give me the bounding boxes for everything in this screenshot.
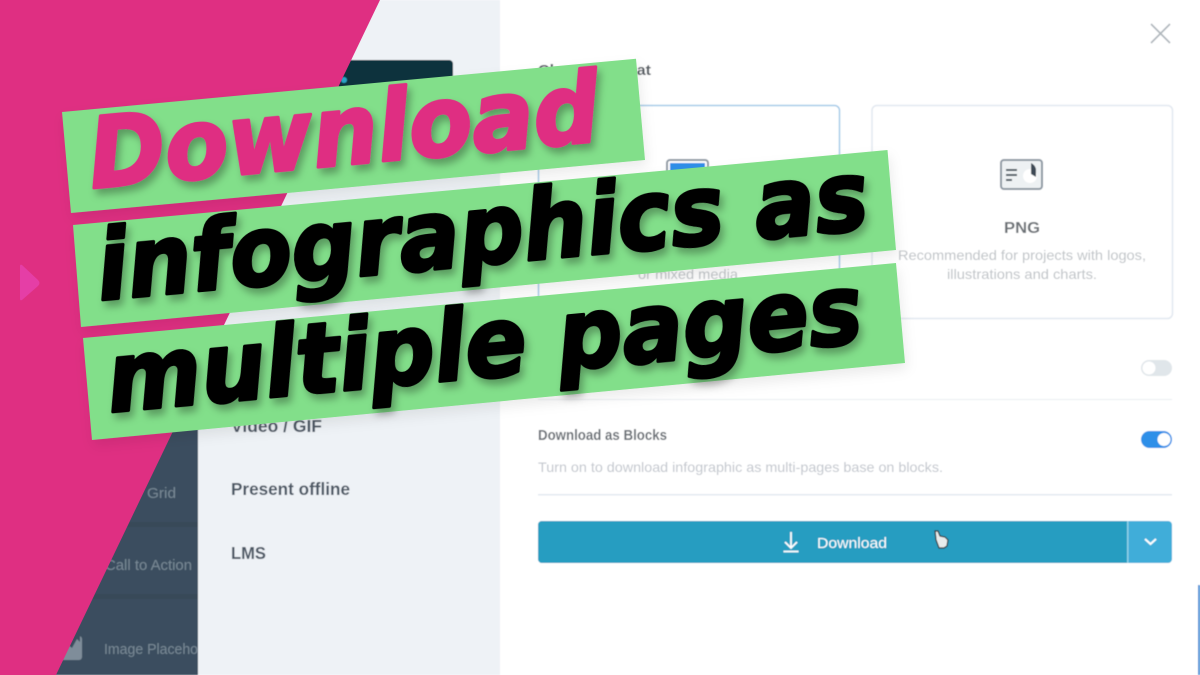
panel: dark editor sidebar <box>0 360 198 675</box>
headline words: multiple pages: multiple pages <box>102 252 867 435</box>
option: Video / GIF: Video / GIF <box>231 416 322 436</box>
description: PNG second line: illustrations and charts. <box>947 266 1097 282</box>
scrollbar sliver at right edge <box>1198 585 1200 675</box>
panel: export options column <box>198 0 500 675</box>
button: Download <box>538 521 1172 563</box>
label: PNG: PNG <box>1004 220 1040 237</box>
icon: download arrow <box>784 532 798 552</box>
headline word: Download: Download <box>84 51 605 211</box>
card: first format option <box>538 106 840 318</box>
panel: dialog white area <box>500 0 1200 675</box>
icon: image placeholder <box>58 634 82 660</box>
panel: pink diagonal shape <box>0 0 380 675</box>
button label: Download <box>817 535 887 552</box>
sidebar label: Image Placeholder: Image Placeho <box>104 642 198 658</box>
toggle: off <box>1141 360 1172 376</box>
option description: Turn on to download infographic as multi-pages base on blocks. <box>538 459 943 475</box>
sidebar label: Grid: Grid <box>147 486 176 502</box>
option: LMS: LMS <box>231 543 266 563</box>
option: Present offline: Present offline <box>231 479 350 499</box>
card: PNG format option <box>872 106 1172 318</box>
icon: hand cursor <box>935 531 948 548</box>
thumbnail image in options column <box>338 60 453 130</box>
headline band: multiple pages <box>83 252 905 440</box>
card caption: or mixed media <box>638 266 738 282</box>
headline band: Download <box>62 51 645 213</box>
description: PNG: Recommended for projects with logos, <box>898 247 1146 263</box>
icon: PNG format <box>1001 160 1042 189</box>
headline band: infographics as <box>73 139 896 327</box>
icon: chevron <box>1145 539 1156 544</box>
sidebar label: Call to Action: Call to Action <box>105 558 192 574</box>
toggle: on <box>1141 431 1172 448</box>
icon: play triangle <box>20 265 40 300</box>
option title: Download as Blocks: Download as Blocks <box>538 428 667 444</box>
icon: image format <box>667 160 708 190</box>
icon: close <box>1151 24 1170 43</box>
headline words: infographics as: infographics as <box>92 139 873 323</box>
heading: Choose format: Choose format <box>538 63 651 79</box>
